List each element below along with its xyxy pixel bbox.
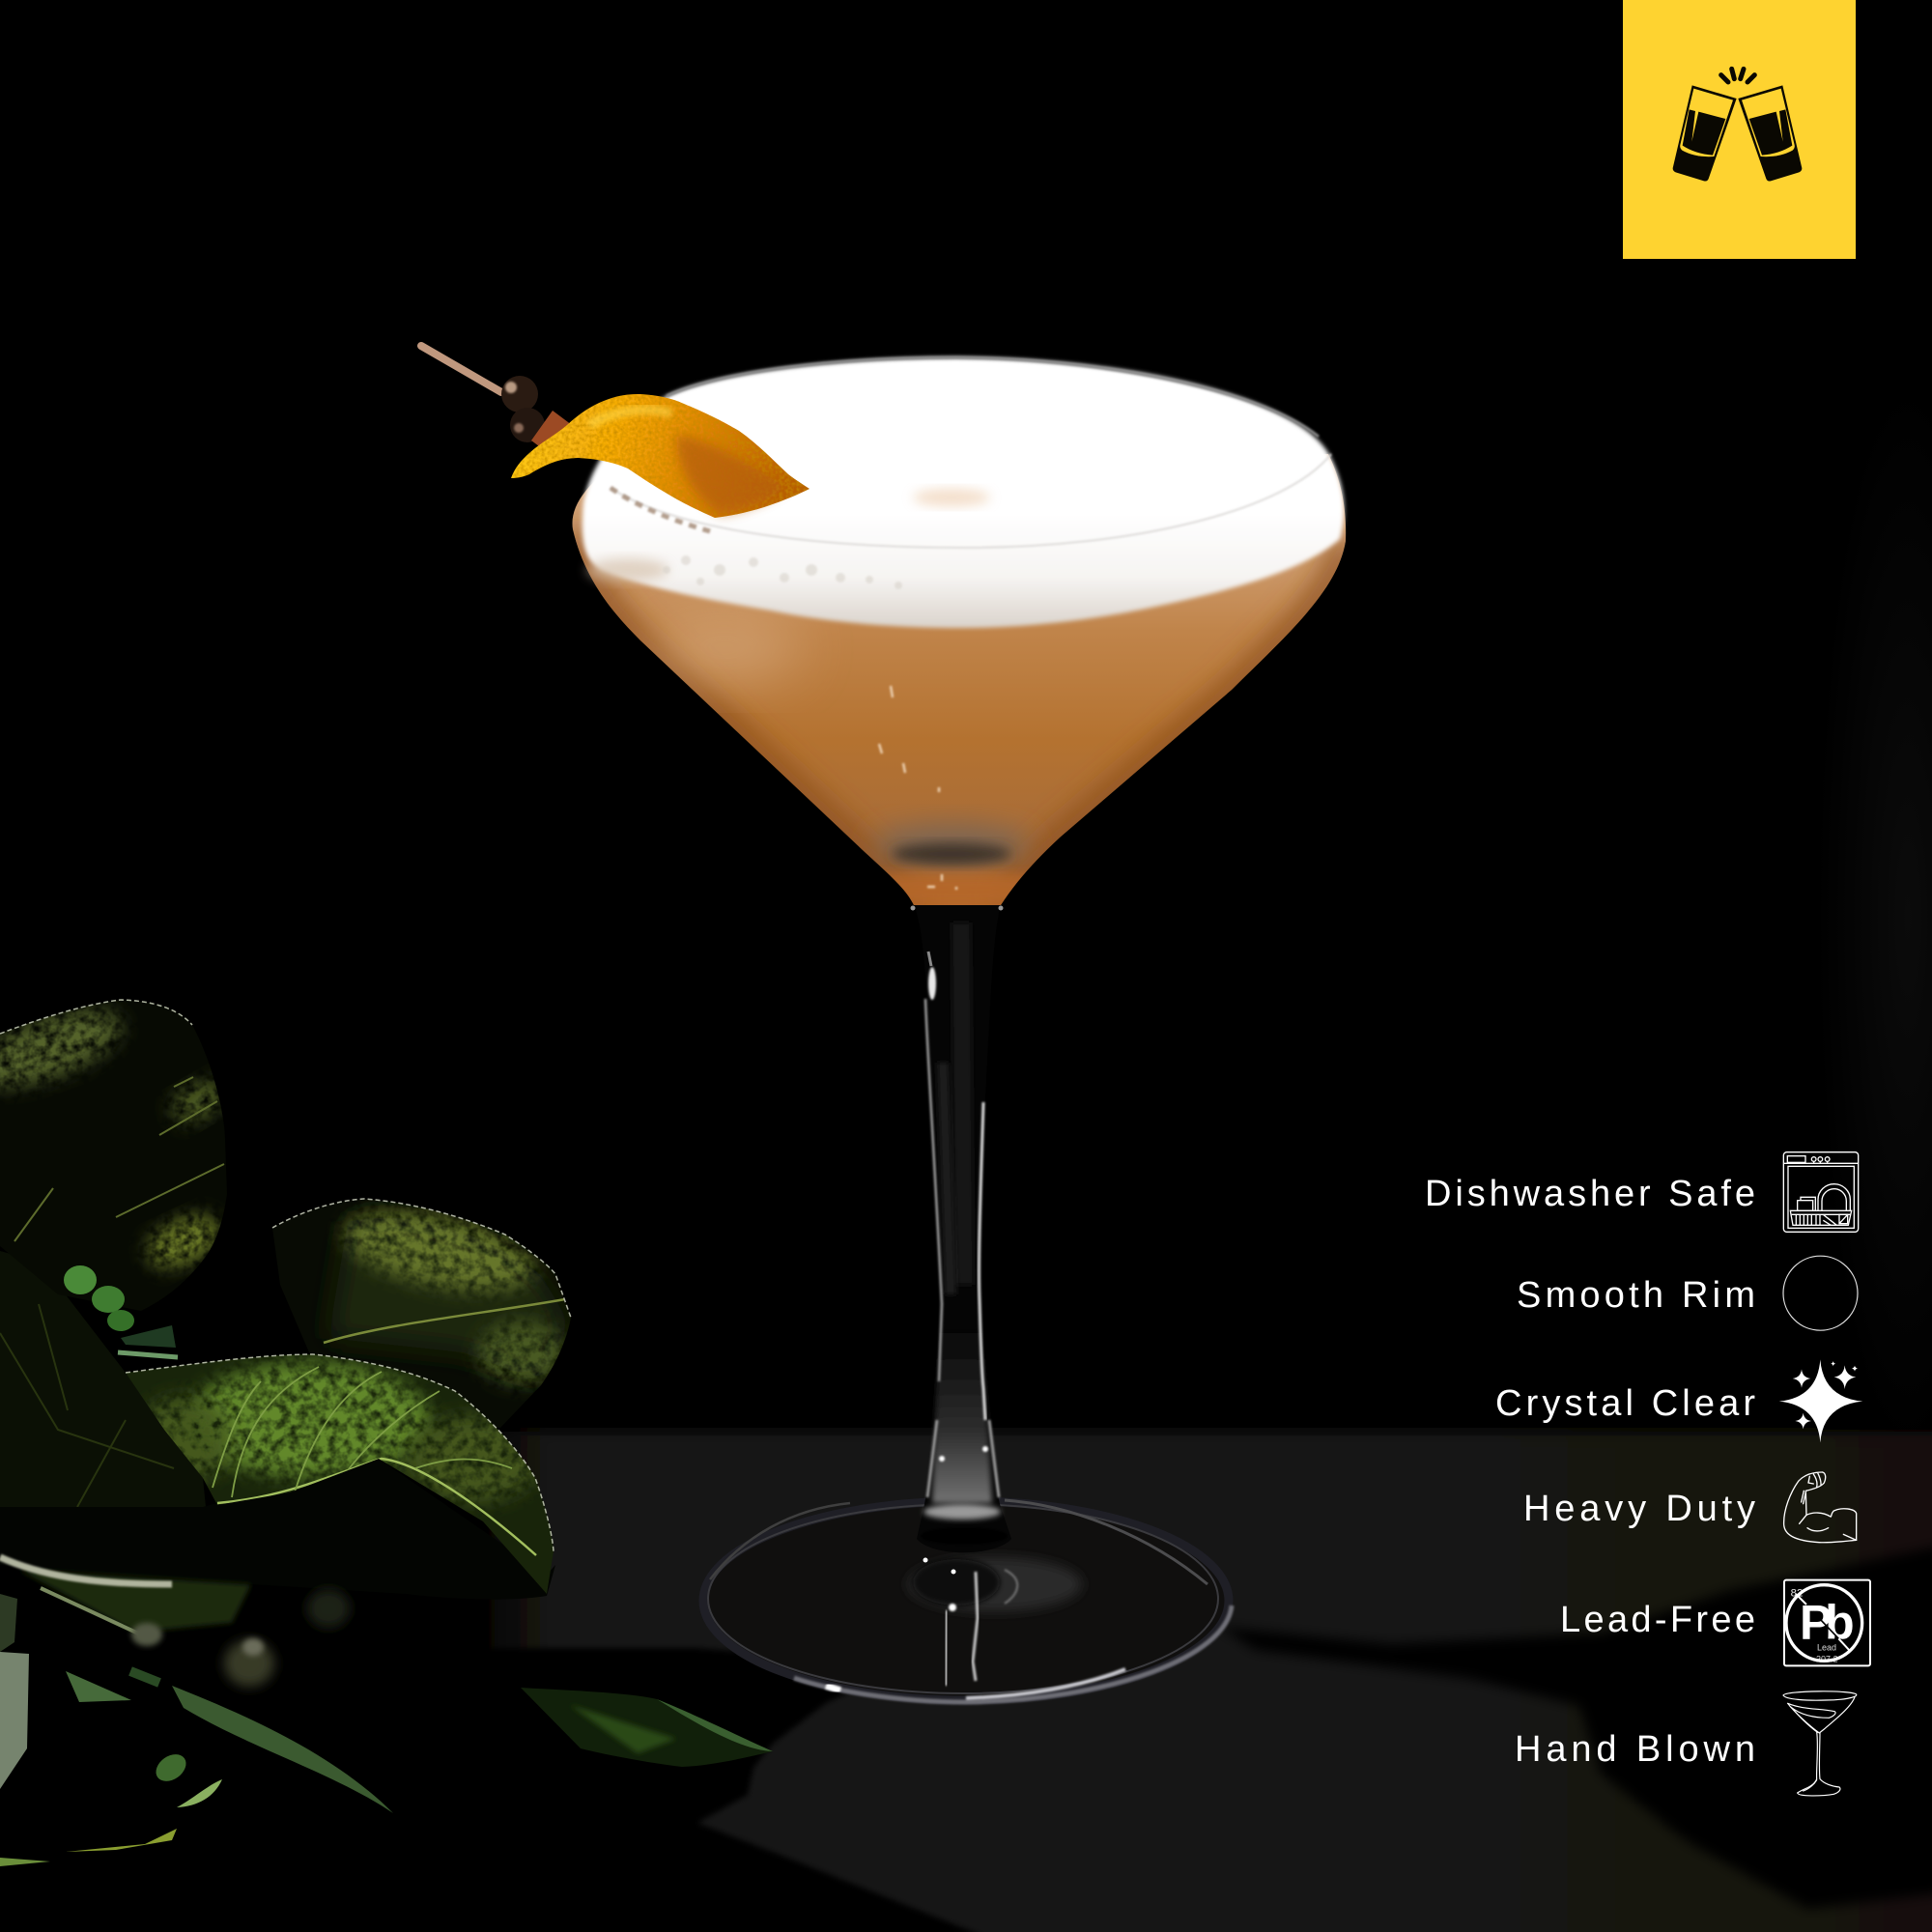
table surface bbox=[0, 1432, 1932, 1932]
leaf: lower shaded body bbox=[0, 1459, 555, 1600]
glass base bbox=[700, 1499, 1232, 1702]
icon: no lead element: Pb bbox=[1800, 1595, 1855, 1649]
sprig leaf: pale bbox=[0, 1652, 29, 1789]
shadow: glass cast wedge bbox=[1219, 1546, 1932, 1909]
base centre reflection bbox=[908, 1557, 1082, 1686]
feature: lead-free: Lead-Free bbox=[1560, 1600, 1755, 1640]
foam head bbox=[582, 357, 1344, 628]
icon: no lead element: 207.2 bbox=[1816, 1654, 1837, 1663]
feature: dishwasher safe bbox=[1425, 1152, 1859, 1232]
icon: circle rim bbox=[1783, 1256, 1858, 1330]
feature: heavy duty: Heavy Duty bbox=[1523, 1489, 1755, 1529]
lower sprigs bbox=[0, 1557, 773, 1866]
left glass bbox=[1673, 85, 1737, 182]
icon: martini outline bbox=[1783, 1691, 1857, 1796]
leaf: left dark bbox=[0, 1251, 208, 1536]
flowers bbox=[224, 1640, 274, 1687]
leaf: central lit bbox=[126, 1354, 554, 1594]
feature: dishwasher safe: Dishwasher Safe bbox=[1425, 1174, 1755, 1214]
right side curtain texture bbox=[1816, 377, 1932, 1430]
orange peel bbox=[511, 394, 810, 518]
leaf: right bbox=[272, 1197, 571, 1428]
cocktail glass bbox=[572, 357, 1346, 1702]
icon: sparkles bbox=[1779, 1359, 1862, 1442]
feature: lead-free bbox=[1560, 1580, 1870, 1665]
feature: crystal clear bbox=[1495, 1359, 1862, 1442]
foliage bbox=[0, 994, 773, 1866]
icon: no lead element bbox=[1784, 1580, 1870, 1665]
feature: hand blown: Hand Blown bbox=[1515, 1729, 1755, 1770]
feature: smooth rim: Smooth Rim bbox=[1517, 1275, 1755, 1316]
right glass bbox=[1738, 85, 1802, 182]
icon: dishwasher bbox=[1783, 1152, 1859, 1232]
glass rim bbox=[611, 454, 1331, 548]
icon: no lead element: Lead bbox=[1817, 1642, 1836, 1652]
sparks bbox=[1721, 69, 1754, 82]
liquid bbox=[572, 454, 1346, 905]
sprig leaf: long bbox=[172, 1686, 393, 1813]
icon: clinking glasses bbox=[1673, 69, 1802, 182]
feature: crystal clear: Crystal Clear bbox=[1495, 1383, 1755, 1424]
foam centre stain bbox=[913, 489, 990, 506]
berries bbox=[64, 1265, 178, 1357]
feature: heavy duty bbox=[1523, 1472, 1857, 1543]
leaf: top left bbox=[0, 994, 232, 1311]
stem bbox=[910, 904, 1011, 1552]
logo badge bbox=[1623, 0, 1856, 259]
icon: flexed arm bbox=[1784, 1472, 1857, 1543]
shadow: foliage on table bbox=[0, 1642, 985, 1932]
garnish: pick, cherries and orange peel bbox=[421, 346, 810, 518]
feature: smooth rim bbox=[1517, 1256, 1858, 1330]
sprig leaf: bottom right bbox=[521, 1688, 773, 1767]
icon: no lead element: 82 bbox=[1791, 1587, 1803, 1599]
feature: hand blown bbox=[1515, 1691, 1857, 1796]
